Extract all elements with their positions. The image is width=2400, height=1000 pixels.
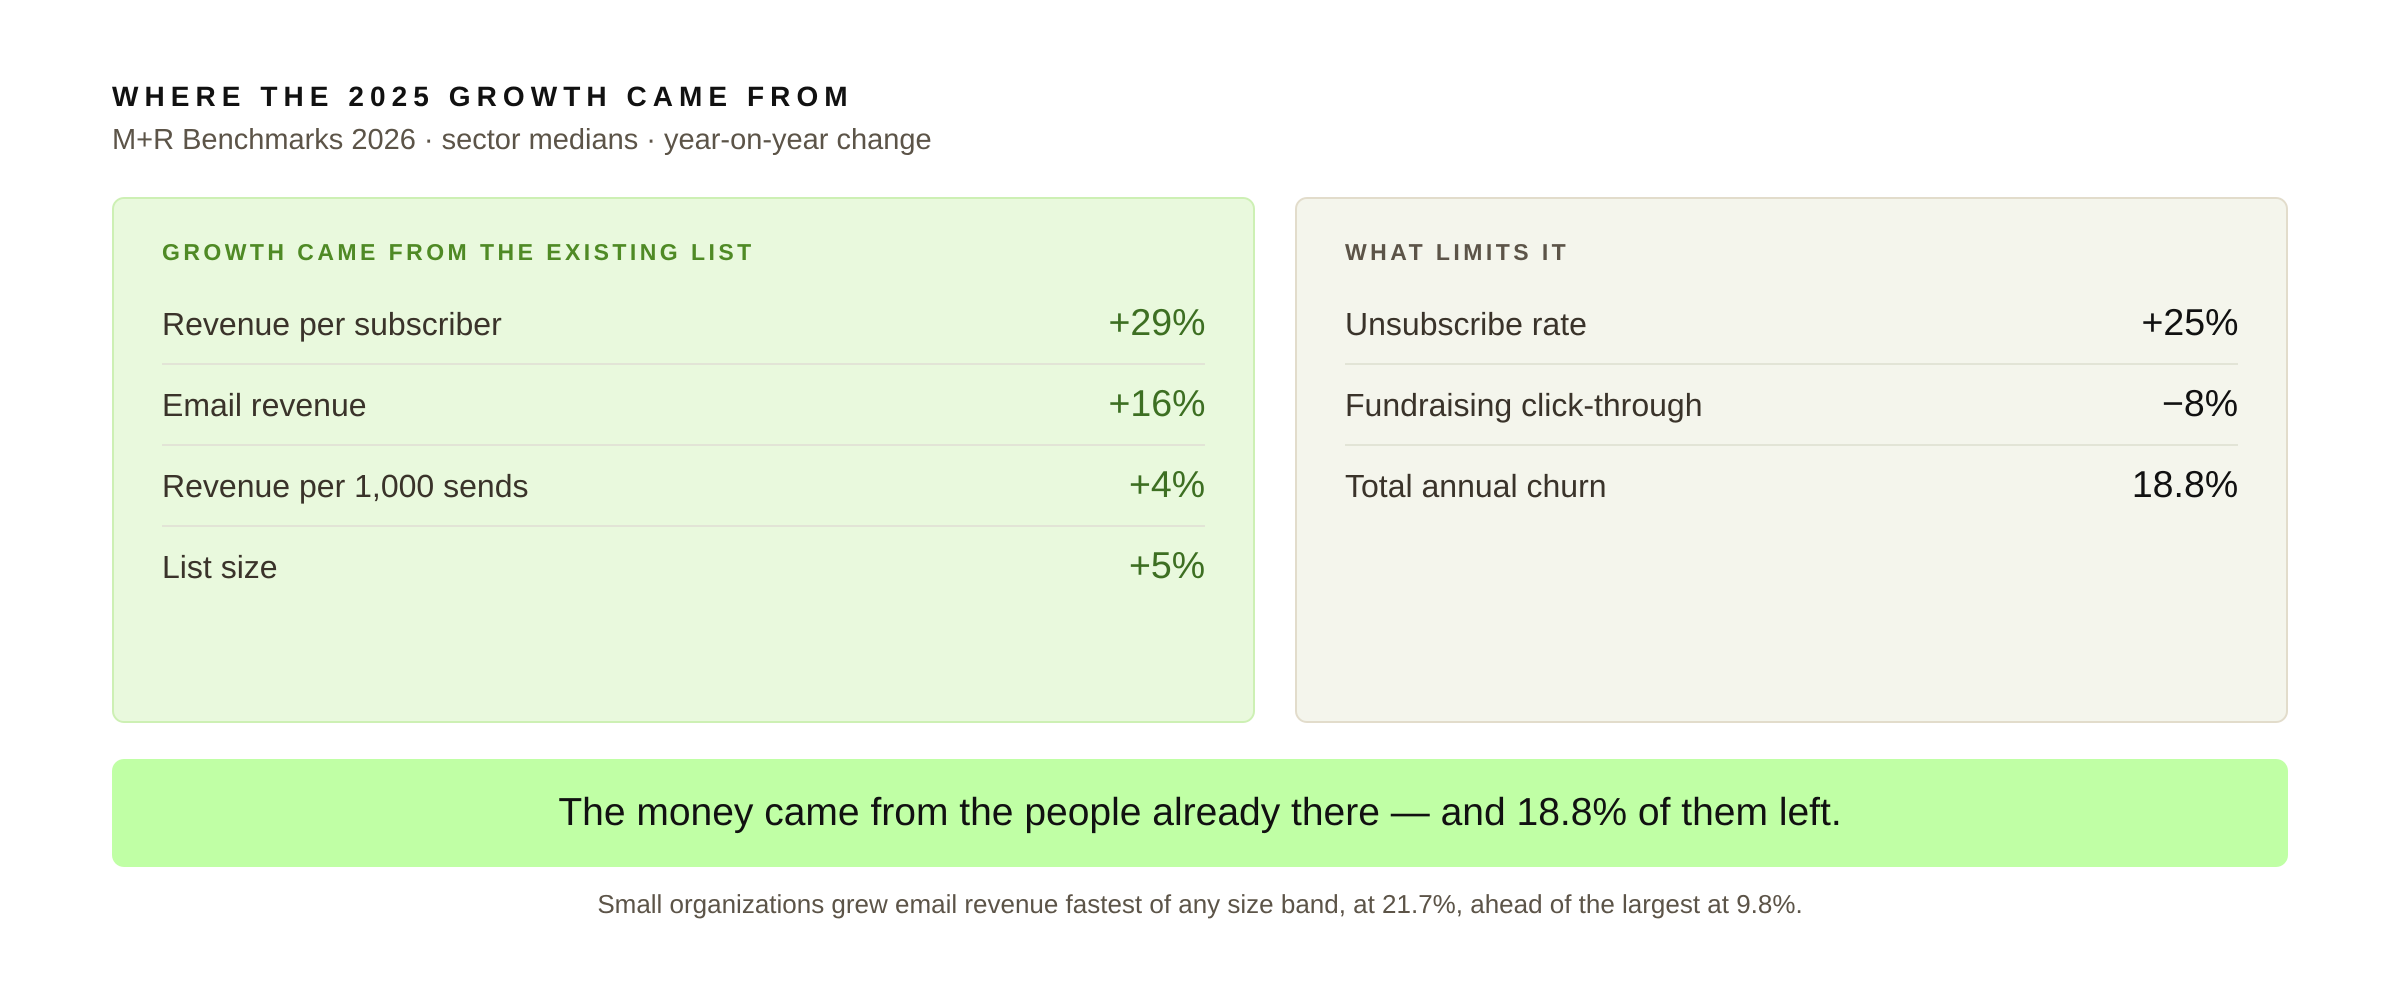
- row: list size: List size: [162, 552, 278, 586]
- row: unsubscribe rate: Unsubscribe rate: [1345, 309, 1587, 343]
- footnote: Small organizations grew email revenue fastest of any size band, at 21.7%, ahead of the largest at 9.8%.: [597, 889, 1803, 919]
- title: WHERE THE 2025 GROWTH CAME FROM: [112, 80, 854, 112]
- row: email revenue: Email revenue: [162, 390, 367, 424]
- panel: growth came from the existing list: [112, 197, 1255, 723]
- callout text: The money came from the people already there — and 18.8% of them left.: [558, 791, 1842, 835]
- row: total annual churn: Total annual churn: [1345, 471, 1607, 505]
- row: revenue per 1,000 sends: Revenue per 1,000 sends: [162, 471, 528, 505]
- row: total annual churn: [1345, 463, 2238, 505]
- row: revenue per subscriber: [162, 304, 1205, 365]
- row: revenue per subscriber: Revenue per subscriber: [162, 309, 502, 343]
- row: total annual churn: 18.8%: [2132, 463, 2238, 505]
- row: list size: +5%: [1129, 544, 1205, 586]
- callout: [112, 759, 2288, 867]
- row: fundraising click-through: Fundraising click-through: [1345, 390, 1702, 424]
- row: unsubscribe rate: +25%: [2141, 301, 2238, 343]
- row: unsubscribe rate: [1345, 304, 2238, 365]
- row: revenue per 1,000 sends: [162, 466, 1205, 527]
- row: revenue per subscriber: +29%: [1108, 301, 1205, 343]
- subtitle: M+R Benchmarks 2026 · sector medians · year-on-year change: [112, 125, 932, 157]
- panel: what limits it: [1295, 197, 2288, 723]
- panel heading: growth: GROWTH CAME FROM THE EXISTING LIST: [162, 242, 755, 266]
- row: email revenue: +16%: [1108, 382, 1205, 424]
- row: email revenue: [162, 385, 1205, 446]
- row: revenue per 1,000 sends: +4%: [1129, 463, 1205, 505]
- row: fundraising click-through: [1345, 385, 2238, 446]
- panel heading: limits: WHAT LIMITS IT: [1345, 242, 1569, 266]
- row: fundraising click-through: −8%: [2162, 382, 2238, 424]
- row: list size: [162, 544, 1205, 586]
